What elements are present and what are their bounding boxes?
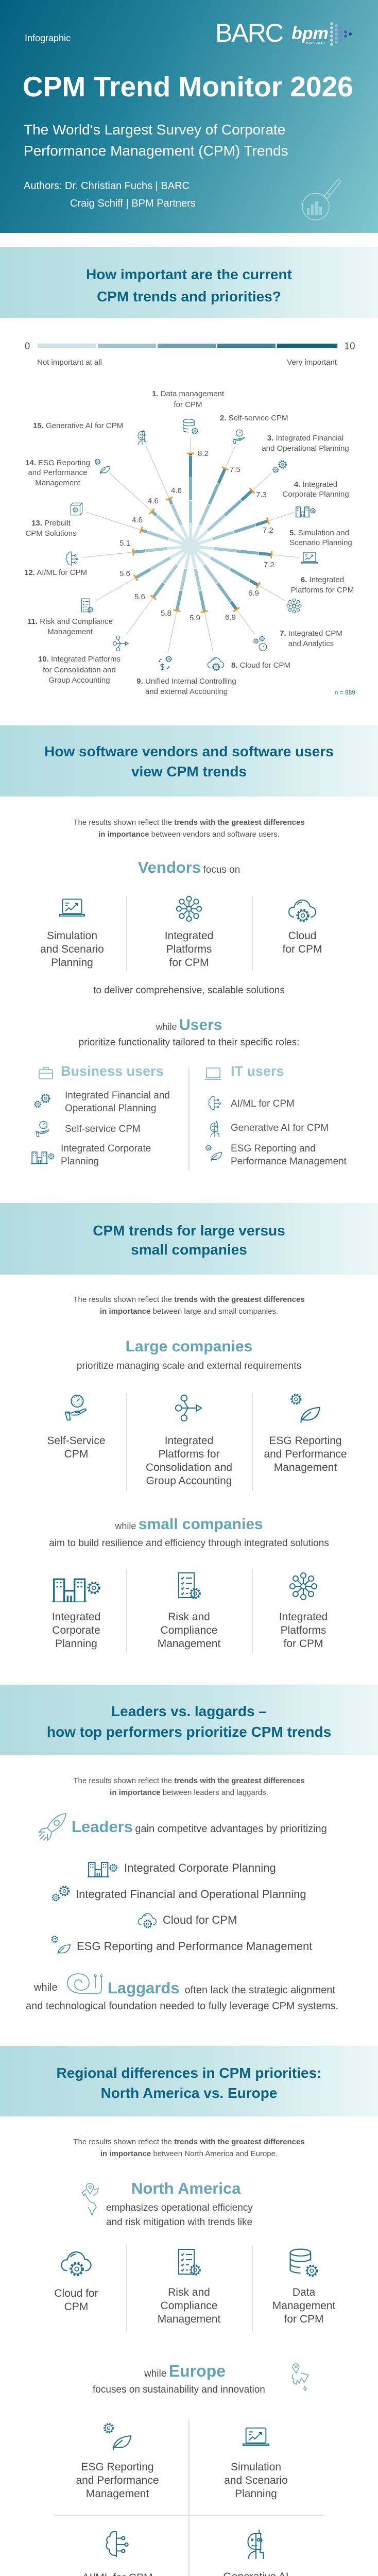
spoke labels: 15. Generative AI for CPM xyxy=(33,421,123,430)
heading: while small companies: while small companies xyxy=(115,1516,263,1533)
logo: bpm partners: bpm xyxy=(291,24,329,43)
spoke labels: and Operational Planning xyxy=(262,444,349,453)
item: ICP xyxy=(87,1857,293,1880)
heading: importance xyxy=(86,266,292,304)
item: self-service xyxy=(36,1121,141,1137)
heading: large vs small xyxy=(93,1223,285,1258)
value labels: 5.9 xyxy=(190,614,200,622)
item: AI/ML xyxy=(208,1096,295,1111)
text: focuses on: focuses on sustainability and innovation xyxy=(93,2384,265,2395)
heading: while Europe: while Europe xyxy=(144,2362,226,2380)
value labels: 6.9 xyxy=(248,589,259,598)
vendor columns xyxy=(40,895,322,971)
column: self-service: CPM xyxy=(64,1448,88,1460)
spoke labels: for Consolidation and xyxy=(43,666,116,674)
cell: ESG: ESG Reporting xyxy=(81,2461,154,2473)
column: integrated platforms xyxy=(165,895,213,969)
spoke labels: 1. Data management xyxy=(152,389,225,398)
item: GenAI xyxy=(210,1121,329,1137)
item: ESG: ESG Reporting and xyxy=(231,1143,316,1154)
column: self-service: Self-Service xyxy=(47,1435,106,1447)
spoke labels: 3. Integrated Financial xyxy=(267,434,343,443)
cell: simulation xyxy=(199,2423,313,2501)
item: self-service: Self-service CPM xyxy=(65,1124,141,1134)
column: ICP: Planning xyxy=(55,1638,97,1650)
column: platforms: for CPM xyxy=(283,1638,323,1650)
value labels: 4.6 xyxy=(171,486,182,495)
column: consolidation: Consolidation and xyxy=(146,1462,232,1473)
cell: simulation: Simulation xyxy=(231,2461,281,2473)
column: risk: Management xyxy=(158,2313,220,2325)
icon: magnifier chart xyxy=(302,179,341,221)
panel: IT users xyxy=(205,1063,347,1167)
north america statement xyxy=(77,2178,283,2230)
column: ICP: Corporate xyxy=(52,1624,100,1636)
column: risk: Management xyxy=(158,1638,220,1650)
spoke labels: Platforms for CPM xyxy=(291,586,354,595)
column: simulation: Simulation xyxy=(47,930,97,942)
column: risk xyxy=(132,2246,246,2326)
legend scale: Very important xyxy=(287,358,337,367)
cell: simulation: and Scenario xyxy=(224,2475,288,2486)
intro text: regional: in importance between North America and Europe. xyxy=(100,2149,278,2158)
column: integrated platforms: for CPM xyxy=(169,957,209,969)
item: IFOP xyxy=(50,1883,333,1906)
intro text: large vs small xyxy=(73,1295,305,1316)
band: section 1 title xyxy=(0,247,378,318)
column: ICP: Integrated xyxy=(52,1611,100,1623)
value labels: 7.3 xyxy=(256,490,267,499)
column: ESG xyxy=(264,1394,347,1473)
item: AI/ML: AI/ML for CPM xyxy=(231,1098,295,1109)
spoke labels: 2. Self-service CPM xyxy=(220,414,288,422)
column: ESG: ESG Reporting xyxy=(269,1435,342,1447)
text: technological foundation: and technological foundation needed to fully leverage CPM systems. xyxy=(26,2001,338,2012)
value labels: 5.6 xyxy=(119,569,130,578)
heading: vendors vs users: How software vendors and software users xyxy=(44,743,334,759)
item: ICP: Integrated Corporate xyxy=(61,1143,151,1154)
text: aim to build: aim to build resilience and efficiency through integrated solutions xyxy=(49,1538,329,1549)
header banner xyxy=(0,0,378,233)
column: risk: Compliance xyxy=(161,1624,217,1636)
value labels: 7.2 xyxy=(263,526,273,535)
intro text: large vs small: in importance between large and small companies. xyxy=(100,1307,278,1316)
heading: regional differences: North America vs. Europe xyxy=(101,2085,277,2101)
heading: leaders vs laggards xyxy=(47,1703,331,1740)
item: ICP: Planning xyxy=(61,1156,99,1167)
column: self-service xyxy=(47,1394,106,1460)
heading: importance: CPM trends and priorities? xyxy=(97,289,281,304)
column: cloud: for CPM xyxy=(282,943,322,955)
item: ICP xyxy=(31,1143,151,1167)
column: consolidation xyxy=(146,1394,232,1487)
text: laggards lack: Laggards often lack the strategic alignment xyxy=(108,1979,335,1997)
intro text: leaders vs laggards: The results shown reflect the trends with the greatest differences xyxy=(73,1776,305,1785)
legend scale: Not important at all xyxy=(37,358,102,367)
heading: Large companies: Large companies xyxy=(126,1338,252,1355)
column: data management: for CPM xyxy=(284,2313,323,2325)
legend scale: 10 xyxy=(344,341,355,352)
spoke labels: 13. Prebuilt xyxy=(31,519,71,528)
spokes xyxy=(81,437,300,654)
spoke labels: and Analytics xyxy=(288,639,334,648)
column: consolidation: Integrated xyxy=(165,1435,213,1447)
column: ICP xyxy=(52,1579,100,1650)
icon: snail xyxy=(66,1973,102,1995)
item: cloud: Cloud for CPM xyxy=(163,1913,237,1926)
value labels xyxy=(119,449,274,622)
band: section 4 title xyxy=(0,1685,378,1755)
text: leaders gain: Leaders gain competitve advantages by prioritizing xyxy=(72,1818,327,1836)
icon: laptop xyxy=(205,1067,221,1080)
column: simulation: and Scenario xyxy=(40,943,104,955)
heading: regional differences: Regional differences in CPM priorities: xyxy=(57,2065,321,2081)
item: IFOP: Operational Planning xyxy=(65,1103,156,1114)
column: risk: Compliance xyxy=(161,2300,217,2312)
item: ESG: Performance Management xyxy=(231,1156,347,1167)
value labels: 7.5 xyxy=(230,465,240,474)
spoke labels: Management xyxy=(47,628,93,636)
column: risk xyxy=(158,1572,220,1650)
item: IFOP: Integrated Financial and xyxy=(65,1090,170,1101)
authors: Authors: Dr. Christian Fuchs | BARC xyxy=(24,180,190,192)
subtitle: The World‘s Largest Survey of Corporate xyxy=(24,122,285,138)
logo: BARC: BARC xyxy=(215,19,283,47)
spoke labels: 9. Unified Internal Controlling xyxy=(136,677,236,686)
spoke labels: 14. ESG Reporting xyxy=(25,459,90,467)
text: emphasizes: and risk mitigation with trends like xyxy=(106,2217,252,2228)
intro text: regional: The results shown reflect the trends with the greatest differences xyxy=(73,2138,305,2146)
logo: bpm partners xyxy=(291,22,352,46)
spoke labels: 10. Integrated Platforms xyxy=(38,655,121,664)
text: prioritize scale: prioritize managing scale and external requirements xyxy=(77,1361,301,1371)
item: IFOP xyxy=(34,1090,170,1114)
icon: briefcase xyxy=(39,1067,53,1079)
subtitle: Performance Management (CPM) Trends xyxy=(24,143,288,159)
band: section 3 title xyxy=(0,1203,378,1275)
heading: while Users: while Users xyxy=(156,1016,222,1033)
heading: vendors vs users: view CPM trends xyxy=(131,764,247,779)
spoke labels xyxy=(24,389,354,696)
spoke labels: Group Accounting xyxy=(48,676,110,685)
leaders statement xyxy=(38,1813,327,1841)
authors xyxy=(24,180,196,209)
item: GenAI: Generative AI for CPM xyxy=(231,1123,329,1133)
cell: ESG xyxy=(61,2421,174,2501)
spoke labels: 4. Integrated xyxy=(294,480,337,489)
radial chart: importance of CPM trends xyxy=(24,341,355,696)
value labels: 5.8 xyxy=(161,609,171,618)
column: platforms: Integrated xyxy=(279,1611,328,1623)
label: Infographic: Infographic xyxy=(25,33,71,43)
item: ESG xyxy=(50,1935,333,1957)
column: platforms: Platforms xyxy=(281,1624,326,1636)
column: data management xyxy=(247,2246,360,2326)
laggards statement xyxy=(21,1971,360,2017)
authors: Craig Schiff | BPM Partners xyxy=(70,198,196,209)
spoke labels: Corporate Planning xyxy=(282,490,349,499)
intro text: leaders vs laggards: in importance between leaders and laggards. xyxy=(110,1788,268,1797)
icon: europe map xyxy=(290,2363,312,2392)
item: IFOP: Integrated Financial and Operational Planning xyxy=(76,1888,306,1901)
column: integrated platforms: Integrated xyxy=(165,930,213,942)
subtitle xyxy=(24,122,288,159)
value labels: 6.9 xyxy=(225,613,236,622)
heading: North America: North America xyxy=(131,2179,240,2197)
band: section 2 title xyxy=(0,725,378,796)
cell: simulation: Planning xyxy=(235,2488,277,2500)
text: to deliver: to deliver comprehensive, scalable solutions xyxy=(93,985,285,996)
sample size: n = 989 xyxy=(335,689,355,696)
value labels: 4.6 xyxy=(132,516,143,524)
large companies columns xyxy=(47,1393,347,1491)
column: cloud xyxy=(20,2246,133,2314)
column: cloud: CPM xyxy=(64,2301,88,2313)
column: cloud xyxy=(282,900,322,955)
column: platforms xyxy=(279,1572,328,1650)
heading: IT users: IT users xyxy=(231,1063,284,1079)
column: integrated platforms: Platforms xyxy=(166,943,212,955)
column: risk: Risk and xyxy=(168,1611,210,1623)
heading: business users: Business users xyxy=(61,1063,164,1079)
text: emphasizes xyxy=(106,2201,253,2230)
spoke labels: 7. Integrated CPM xyxy=(280,629,342,638)
spoke labels: Management xyxy=(35,479,81,487)
spoke labels: for CPM xyxy=(174,400,202,409)
spoke labels: and external Accounting xyxy=(145,687,228,696)
intro text: vendors vs users: The results shown reflect the trends with the greatest differences xyxy=(73,818,305,827)
text: while: while xyxy=(34,1982,58,1993)
europe statement xyxy=(88,2360,319,2396)
column: ESG: Management xyxy=(274,1462,337,1473)
value labels: 7.2 xyxy=(264,561,274,569)
column: risk: Risk and xyxy=(168,2286,210,2298)
cell: AI/ML xyxy=(61,2528,174,2576)
cell: ESG: Management xyxy=(86,2488,149,2500)
legend scale: 0 xyxy=(25,341,30,352)
column: simulation: Planning xyxy=(51,957,93,969)
title: CPM Trend Monitor 2026 xyxy=(23,71,353,103)
legend scale xyxy=(25,341,355,367)
column: data management: Management xyxy=(272,2300,335,2312)
north america columns xyxy=(0,2246,378,2331)
value labels: 5.1 xyxy=(119,539,130,548)
intro text: large vs small: The results shown reflect the trends with the greatest differences xyxy=(73,1295,305,1304)
small companies columns xyxy=(52,1569,328,1653)
column: simulation xyxy=(40,899,104,969)
heading: vendors vs users xyxy=(44,743,334,779)
column: consolidation: Group Accounting xyxy=(146,1475,232,1487)
europe grid xyxy=(51,2419,330,2576)
spoke labels: 8. Cloud for CPM xyxy=(231,661,290,670)
column: cloud: Cloud xyxy=(288,930,316,942)
heading: large vs small: small companies xyxy=(131,1242,247,1258)
heading: regional differences xyxy=(0,2063,378,2103)
heading: Vendors focus on: Vendors focus on xyxy=(138,858,240,876)
column: data management: Data xyxy=(293,2286,315,2298)
icon: americas map xyxy=(81,2182,100,2215)
logo: bpm partners: PARTNERS xyxy=(306,42,326,45)
item: ESG: ESG Reporting and Performance Management xyxy=(77,1940,312,1953)
panel: business users xyxy=(31,1063,170,1167)
icon: rocket xyxy=(38,1813,66,1841)
heading: leaders vs laggards: how top performers prioritize CPM trends xyxy=(47,1724,331,1740)
spoke labels: 12. AI/ML for CPM xyxy=(24,568,87,577)
value labels: 8.2 xyxy=(198,449,209,458)
spoke icons xyxy=(66,419,318,670)
heading: importance: How important are the current xyxy=(86,266,292,282)
spoke labels: Scenario Planning xyxy=(289,538,352,547)
heading: leaders vs laggards: Leaders vs. laggards – xyxy=(111,1703,267,1719)
cell: ESG: and Performance xyxy=(76,2475,159,2486)
item: cloud xyxy=(137,1909,291,1931)
spoke labels: 11. Risk and Compliance xyxy=(27,617,113,626)
cell: GenAI xyxy=(199,2526,313,2576)
spoke labels: 6. Integrated xyxy=(301,575,344,584)
intro text: vendors vs users xyxy=(73,818,305,839)
item: ICP: Integrated Corporate Planning xyxy=(124,1861,276,1874)
item: ESG xyxy=(205,1143,347,1167)
leaders list xyxy=(46,1857,335,1958)
column: ESG: and Performance xyxy=(264,1448,347,1460)
value labels: 5.6 xyxy=(134,592,145,601)
spoke labels: 5. Simulation and xyxy=(289,529,349,537)
column: cloud: Cloud for xyxy=(54,2287,98,2299)
spoke labels: CPM Solutions xyxy=(25,529,77,538)
text: prioritize functionality: prioritize functionality tailored to their specific roles: xyxy=(79,1037,299,1048)
text: emphasizes: emphasizes operational efficiency xyxy=(106,2202,253,2213)
intro text: leaders vs laggards xyxy=(73,1776,305,1797)
value labels: 4.6 xyxy=(148,497,159,505)
heading: large vs small: CPM trends for large versus xyxy=(93,1223,285,1239)
column: consolidation: Platforms for xyxy=(158,1448,220,1460)
intro text: regional xyxy=(0,2136,378,2160)
spoke labels: and Performance xyxy=(28,468,88,477)
band: section 5 title xyxy=(0,2046,378,2116)
intro text: vendors vs users: in importance between vendors and software users. xyxy=(98,830,280,839)
